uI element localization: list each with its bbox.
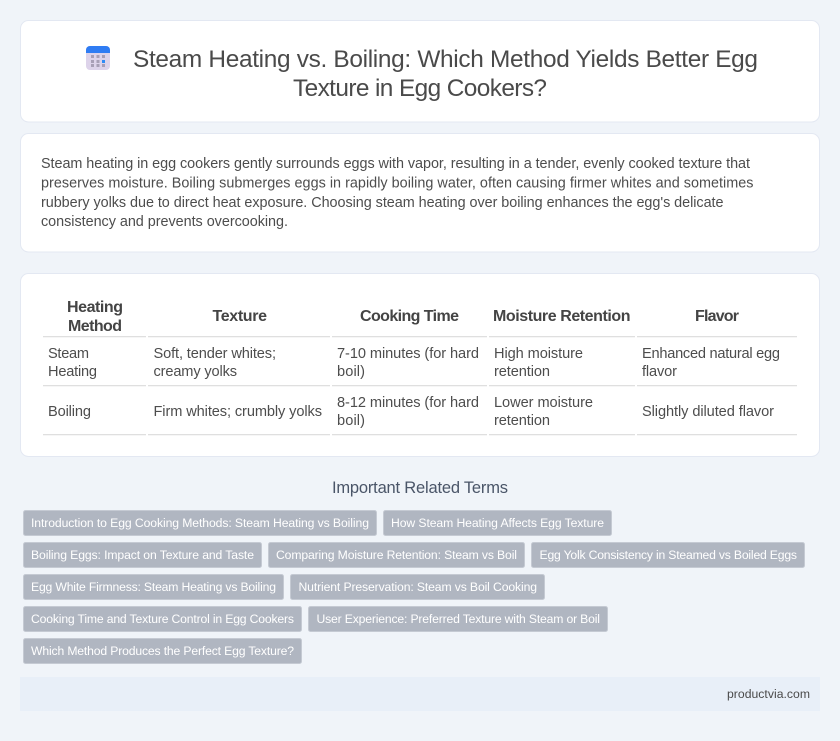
table row: steam heating: Soft, tender whites;	[154, 346, 276, 362]
table row: steam heating: Steam	[48, 346, 89, 362]
panel: summary	[20, 134, 820, 252]
table row: steam heating: boil)	[337, 364, 365, 380]
table row: boiling: Firm whites; crumbly yolks	[154, 404, 322, 420]
table row: steam heating: High moisture	[494, 346, 583, 362]
table row: steam heating: 7-10 minutes (for hard	[337, 346, 479, 362]
table row: steam heating: retention	[494, 364, 550, 380]
table header row: Flavor	[695, 308, 739, 325]
table row: steam heating: Heating	[48, 364, 97, 380]
tag: User Experience: Preferred Texture with Steam or Boil	[316, 612, 600, 626]
table row: boiling	[48, 395, 774, 429]
text block: summary paragraph: consistency and prevents overcooking.	[41, 214, 288, 230]
table row: steam heating	[48, 346, 780, 380]
text block: summary paragraph: preserves moisture. Boiling submerges eggs in rapidly boiling water, often causing firmer whites and sometimes	[41, 176, 754, 192]
text block: summary paragraph: Steam heating in egg cookers gently surrounds eggs with vapor, resulting in a tender, evenly cooked texture that	[41, 156, 750, 172]
tag: Which Method Produces the Perfect Egg Texture?	[31, 644, 294, 658]
tag	[24, 574, 284, 600]
tag: Cooking Time and Texture Control in Egg Cookers	[31, 612, 294, 626]
table row: steam heating: flavor	[642, 364, 677, 380]
table header row: Heating	[67, 299, 123, 316]
heading: related terms: Important Related Terms	[332, 479, 508, 497]
tag	[24, 606, 302, 632]
table row: steam heating: creamy yolks	[154, 364, 237, 380]
tag	[24, 542, 262, 568]
table row: boiling: retention	[494, 413, 550, 429]
text block: summary paragraph	[41, 156, 754, 230]
footer	[20, 677, 820, 711]
table row: boiling: 8-12 minutes (for hard	[337, 395, 479, 411]
tag	[532, 542, 804, 568]
tag	[268, 542, 524, 568]
table row: steam heating: Enhanced natural egg	[642, 346, 780, 362]
tag: Nutrient Preservation: Steam vs Boil Cooking	[298, 580, 537, 594]
table row: boiling: Boiling	[48, 404, 91, 420]
table header row	[67, 299, 739, 335]
panel: related term tags	[24, 510, 804, 664]
tag	[290, 574, 544, 600]
tag: Introduction to Egg Cooking Methods: Steam Heating vs Boiling	[31, 516, 369, 530]
tag	[384, 510, 612, 536]
title: Texture in Egg Cookers?	[293, 75, 547, 102]
table header row: Moisture Retention	[493, 308, 630, 325]
tag: Comparing Moisture Retention: Steam vs Boil	[276, 548, 517, 562]
footer source text: productvia.com	[727, 687, 810, 701]
tag: Egg White Firmness: Steam Heating vs Boiling	[31, 580, 276, 594]
title: Steam Heating vs. Boiling: Which Method Yields Better Egg	[133, 46, 758, 73]
panel: header	[20, 20, 820, 122]
table row: boiling: Lower moisture	[494, 395, 593, 411]
tag	[308, 606, 608, 632]
table header row: Method	[68, 318, 122, 335]
table header row: Cooking Time	[360, 308, 459, 325]
panel: comparison table	[20, 274, 820, 456]
tag	[24, 510, 376, 536]
text block: summary paragraph: rubbery yolks due to direct heat exposure. Choosing steam heating over boiling enhances the egg's delicate	[41, 195, 724, 211]
tag: How Steam Heating Affects Egg Texture	[391, 516, 604, 530]
tag: Boiling Eggs: Impact on Texture and Taste	[31, 548, 254, 562]
icon: calendar	[86, 46, 110, 70]
table row: boiling: boil)	[337, 413, 365, 429]
tag	[24, 638, 302, 664]
table header row: Texture	[212, 308, 267, 325]
tag: Egg Yolk Consistency in Steamed vs Boiled Eggs	[540, 548, 797, 562]
title	[133, 46, 758, 102]
table row: boiling: Slightly diluted flavor	[642, 404, 774, 420]
